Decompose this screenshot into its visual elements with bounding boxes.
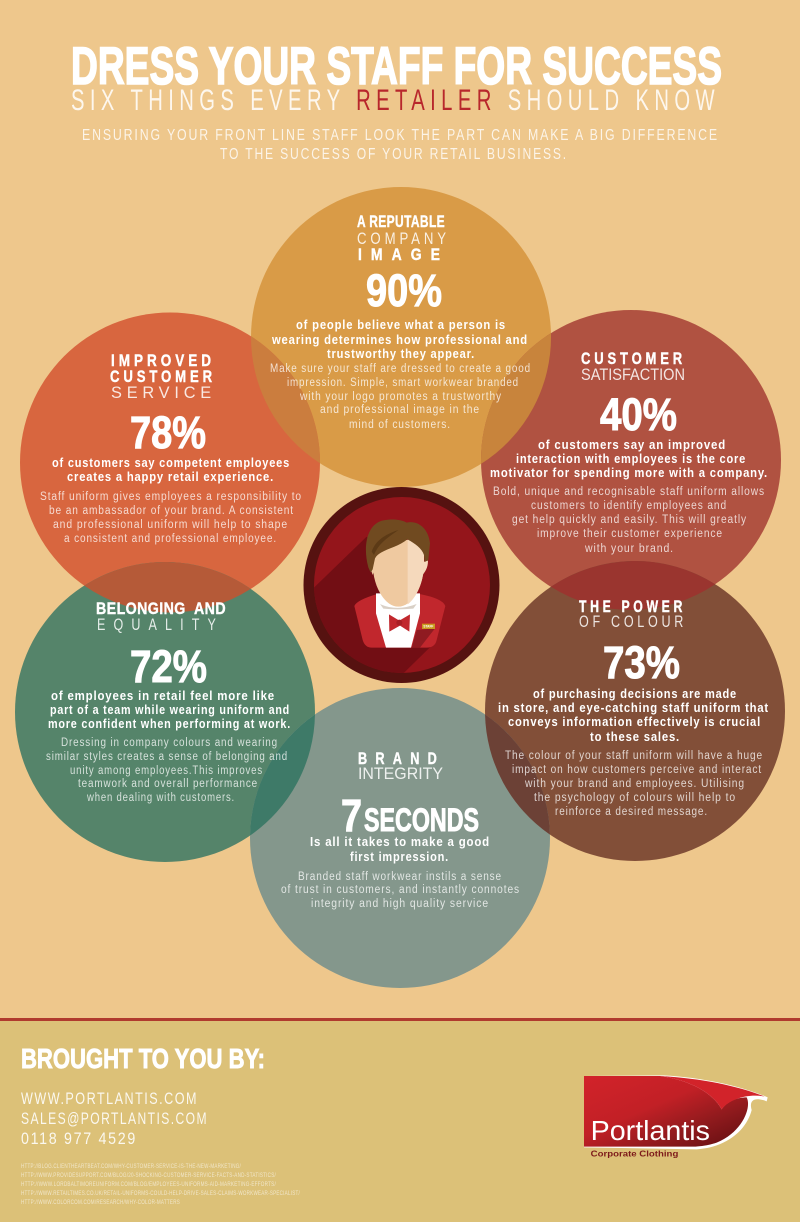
stat description: more confident when performing at work. <box>48 717 291 731</box>
stat description <box>271 318 528 361</box>
body text <box>40 491 302 545</box>
body text: Make sure your staff are dressed to create a good <box>270 363 531 375</box>
body text: with your logo promotes a trustworthy <box>299 391 502 403</box>
body text: with your brand and employees. Utilising <box>524 778 745 790</box>
stat description <box>498 687 769 744</box>
stat description <box>310 835 490 864</box>
stat description: motivator for spending more with a company. <box>490 466 768 480</box>
contact details: 0118 977 4529 <box>21 1129 137 1148</box>
stat: 73%: 73% <box>603 637 680 688</box>
heading: OF COLOUR <box>579 612 687 631</box>
circle: customer satisfaction <box>481 310 781 610</box>
stat description: part of a team while wearing uniform and <box>50 703 290 717</box>
heading: BELONGING AND <box>96 599 226 618</box>
body text: reinforce a desired message. <box>555 806 708 818</box>
heading <box>581 349 686 384</box>
stat description: interaction with employees is the core <box>516 452 746 466</box>
body text: mind of customers. <box>349 419 451 431</box>
intro text: TO THE SUCCESS OF YOUR RETAIL BUSINESS. <box>220 146 568 163</box>
central staff icon: STAFF <box>423 625 433 629</box>
body text: similar styles creates a sense of belonging and <box>46 751 288 763</box>
source links: HTTP://WWW.LORDBALTIMOREUNIFORM.COM/BLOG/EMPLOYEES-UNIFORMS-AID-MARKETING-EFFORTS/ <box>21 1182 276 1188</box>
stat: 7 seconds <box>341 790 479 841</box>
heading <box>96 599 226 634</box>
source links: HTTP://WWW.COLORCOM.COM/RESEARCH/WHY-COLOR-MATTERS <box>21 1200 180 1206</box>
heading: A REPUTABLE <box>357 212 445 231</box>
circle: improved customer service <box>20 312 320 612</box>
stat: 7 seconds: 7 <box>341 790 362 841</box>
body text: with your brand. <box>584 543 674 555</box>
stat description: of employees in retail feel more like <box>51 689 275 703</box>
body text: and professional image in the <box>320 404 480 416</box>
body text <box>46 737 288 804</box>
stat description <box>52 456 290 484</box>
heading <box>110 351 216 402</box>
stat: 72%: 72% <box>130 641 207 692</box>
circle: belonging and equality <box>15 562 315 862</box>
panel: belonging and equality <box>46 599 291 804</box>
body text: improve their customer experience <box>537 528 723 540</box>
body text <box>270 363 531 431</box>
source links <box>21 1164 300 1206</box>
body text <box>493 486 765 555</box>
source links: HTTP://BLOG.CLIENTHEARTBEAT.COM/WHY-CUSTOMER-SERVICE-IS-THE-NEW-MARKETING/ <box>21 1164 241 1170</box>
stat description: trustworthy they appear. <box>327 347 475 361</box>
stat: 90%: 90% <box>366 265 442 316</box>
heading <box>358 749 445 783</box>
heading <box>357 212 450 264</box>
body text: and professional uniform will help to shape <box>53 519 288 531</box>
circle: power of colour <box>485 561 785 861</box>
panel: customer satisfaction <box>490 349 768 555</box>
logo: Portlantis <box>584 1075 768 1159</box>
heading: SERVICE <box>111 383 216 402</box>
contact details: SALES@PORTLANTIS.COM <box>21 1109 208 1128</box>
heading: EQUALITY <box>97 615 224 634</box>
heading: INTEGRITY <box>358 764 443 783</box>
body text: integrity and high quality service <box>311 898 489 910</box>
body text: the psychology of colours will help to <box>534 792 736 804</box>
body text: when dealing with customers. <box>86 792 235 804</box>
panel: brand integrity <box>281 749 520 910</box>
contact details: WWW.PORTLANTIS.COM <box>21 1089 198 1108</box>
stat description: to these sales. <box>590 730 680 744</box>
body text: customers to identify employees and <box>531 500 727 512</box>
heading: IMPROVED <box>111 351 215 370</box>
stat: 7 seconds: SECONDS <box>364 802 479 838</box>
panel: improved customer service <box>40 351 302 545</box>
body text: be an ambassador of your brand. A consistent <box>49 505 294 517</box>
stat description: Is all it takes to make a good <box>310 835 490 849</box>
intro text <box>82 127 719 163</box>
body text: of trust in customers, and instantly connotes <box>281 884 520 896</box>
stat description: of purchasing decisions are made <box>533 687 737 701</box>
circle: reputable company image <box>251 187 551 487</box>
central staff icon <box>304 487 500 683</box>
heading: BRAND <box>358 749 445 768</box>
stat description: of customers say competent employees <box>52 456 290 470</box>
body text: impression. Simple, smart workwear branded <box>287 377 519 389</box>
body text: a consistent and professional employee. <box>64 533 277 545</box>
heading: CUSTOMER <box>110 367 216 386</box>
body text: Branded staff workwear instils a sense <box>298 871 502 883</box>
stat description: of customers say an improved <box>538 438 726 452</box>
source links: HTTP://WWW.RETAILTIMES.CO.UK/RETAIL-UNIFORMS-COULD-HELP-DRIVE-SALES-CLAIMS-WORKWEAR-SPECIALIST/ <box>21 1191 300 1197</box>
stat: 78%: 78% <box>130 407 206 458</box>
overlap lenses between circles <box>84 333 715 836</box>
heading: CUSTOMER <box>581 349 686 368</box>
source links: HTTP://WWW.PROVIDESUPPORT.COM/BLOG/20-SHOCKING-CUSTOMER-SERVICE-FACTS-AND-STATISTICS/ <box>21 1173 276 1179</box>
logo: Portlantis: Corporate Clothing <box>591 1149 678 1159</box>
heading: IMAGE <box>358 245 449 264</box>
body text: get help quickly and easily. This will greatly <box>512 514 747 526</box>
heading <box>579 597 687 631</box>
body text: Bold, unique and recognisable staff uniform allows <box>493 486 765 498</box>
stat description: in store, and eye-catching staff uniform that <box>498 701 769 715</box>
logo: Portlantis: Portlantis <box>591 1115 710 1146</box>
stat description: conveys information effectively is crucial <box>508 715 761 729</box>
footer panel <box>0 1018 800 1222</box>
body text: teamwork and overall performance <box>78 778 258 790</box>
stat description <box>490 438 768 480</box>
stat description: wearing determines how professional and <box>271 333 528 347</box>
body text: impact on how customers perceive and interact <box>512 764 762 776</box>
body text <box>505 750 763 818</box>
body text: unity among employees.This improves <box>70 765 263 777</box>
body text: Dressing in company colours and wearing <box>61 737 278 749</box>
stat description <box>48 689 291 731</box>
panel: reputable company image <box>270 212 531 431</box>
heading: SATISFACTION <box>581 365 685 384</box>
heading: THE POWER <box>579 597 686 616</box>
body text <box>281 871 520 910</box>
heading: COMPANY <box>357 229 450 248</box>
body text: Staff uniform gives employees a responsibility to <box>40 491 302 503</box>
panel: power of colour <box>498 597 769 818</box>
body text: The colour of your staff uniform will have a huge <box>505 750 763 762</box>
contact details <box>21 1089 208 1148</box>
stat description: creates a happy retail experience. <box>67 470 274 484</box>
circle: brand integrity <box>250 688 550 988</box>
stat: 40%: 40% <box>600 389 677 440</box>
stat description: of people believe what a person is <box>296 318 506 332</box>
stat description: first impression. <box>350 850 449 864</box>
footer heading: BROUGHT TO YOU BY: <box>21 1043 265 1074</box>
